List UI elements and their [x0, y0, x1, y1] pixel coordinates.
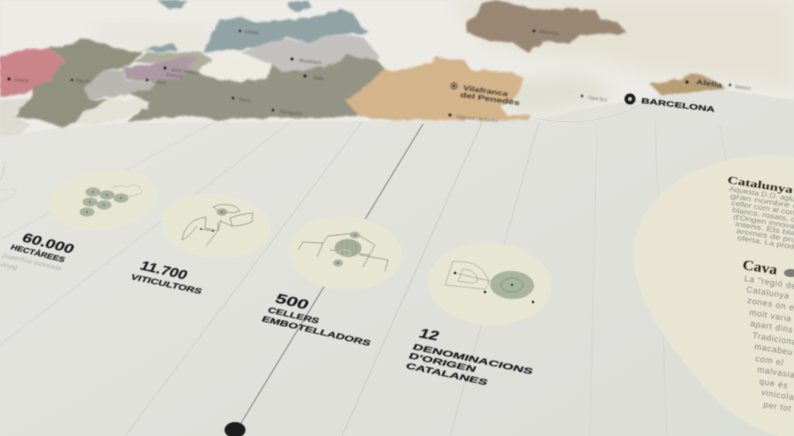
region: cream [197, 55, 273, 82]
badge circle: wineries [286, 213, 404, 293]
timeline end dot [224, 422, 246, 436]
region: light grey [85, 70, 157, 100]
panel: D.O. descriptions [633, 156, 794, 436]
text block: Catalunya [727, 175, 794, 254]
panel background blob [633, 156, 794, 436]
icon: D.O. monogram [445, 261, 535, 303]
region: purple [123, 57, 197, 80]
icon: grape bunch [80, 185, 142, 217]
map labels: Alella [696, 79, 723, 90]
region: blue small [143, 0, 312, 52]
stat: 11.700 viticultors [129, 189, 274, 296]
Barcelona label: BARCELONA [641, 96, 716, 114]
region: blue [203, 9, 370, 52]
text block: Catalunya: d'Origen innovadora [733, 214, 794, 234]
icon: cava marker [784, 269, 794, 277]
timeline guide lines [0, 120, 772, 436]
text block: Cava: apart dins [750, 318, 794, 335]
region: brown [466, 0, 627, 52]
value: 60.000 hectàrees [0, 230, 77, 273]
value: 500 cellers embotelladors: CELLERS [266, 306, 322, 326]
map labels: del Penedès [460, 92, 520, 107]
map labels: Montblanc [299, 58, 323, 66]
text block: Catalunya: intens. Els blancs [735, 221, 794, 240]
text block: Cava: macabeu [754, 341, 794, 357]
map labels: Vilafranca [463, 85, 508, 98]
icon: grape grower [182, 204, 253, 246]
map labels [8, 29, 751, 124]
region: tan grey [133, 52, 213, 72]
text block: Catalunya: aromes de prunes [736, 228, 794, 247]
value: 11.700 viticultors: 11.700 [138, 258, 190, 282]
coast curve [535, 105, 640, 122]
value: 60.000 hectàrees: 60.000 [20, 230, 77, 256]
map labels: Girona [14, 77, 30, 84]
region: cream bottom [75, 100, 147, 125]
value: 11.700 viticultors [129, 258, 204, 296]
text block: Catalunya: gran nombre de [730, 193, 794, 212]
text block: Cava [741, 258, 794, 413]
text block: Cava: Cava [741, 258, 778, 278]
map labels: Falset [152, 79, 167, 86]
value: 12 denominacions d'origen catalanes [404, 326, 536, 387]
value: 12 denominacions d'origen catalanes: DENOMINACIONS [411, 342, 536, 376]
region: olive right [127, 55, 392, 122]
value: 500 cellers embotelladors: EMBOTELLADORS [260, 315, 373, 348]
text block: Cava: Catalunya [746, 284, 790, 301]
map labels: Sant Sadurní [171, 67, 201, 77]
text block: Cava: que és [759, 376, 789, 391]
map labels: Lleida [245, 29, 259, 36]
map labels: Ripoll [76, 78, 89, 85]
value: 12 denominacions d'origen catalanes: D'ORIGEN [407, 351, 478, 374]
text block: Catalunya: celler com al conjunt [731, 200, 794, 219]
map labels: Valls [313, 75, 324, 82]
text block: Catalunya: Catalunya [727, 175, 794, 196]
map labels: Mataró [735, 84, 751, 92]
stat: 60.000 hectàrees [0, 163, 162, 273]
badge circle: denominations [426, 240, 554, 328]
region: Alella [649, 73, 727, 95]
map labels: d'Anoia [166, 72, 183, 80]
badge circle: growers [158, 189, 274, 263]
text block: Catalunya: blancs, rosats, cava [732, 207, 794, 226]
value: 12 denominacions d'origen catalanes: 12 [417, 326, 442, 343]
text block: Cava: molt varia [749, 307, 793, 324]
region: olive left [14, 38, 142, 127]
map labels: Vilanova i la Geltrú [456, 114, 498, 124]
value: 11.700 viticultors: VITICULTORS [129, 273, 204, 296]
badge circle: hectares [44, 163, 162, 237]
map labels: Reus [239, 97, 252, 104]
region: orange Vilafranca [345, 57, 531, 120]
text block: Cava: per tot [763, 399, 792, 413]
map of Catalan wine regions [0, 0, 794, 137]
text block: Cava: vinicola [761, 387, 794, 402]
value: 500 cellers embotelladors: 500 [273, 291, 312, 312]
map labels: Tarragona [279, 109, 302, 117]
region: lavender grey [240, 35, 380, 72]
Barcelona label [624, 94, 716, 114]
value: 60.000 hectàrees: (superfície conreada [2, 252, 62, 273]
text block: Cava: com el [755, 353, 785, 367]
region: pink [0, 48, 65, 97]
stat: 12 denominacions d'origen catalanes [404, 240, 554, 387]
value: 60.000 hectàrees: HECTÀREES [9, 243, 67, 264]
icon: winery building [298, 232, 388, 271]
value: 60.000 hectàrees: vinya) [0, 261, 18, 272]
stat: 500 cellers embotelladors [260, 213, 404, 348]
map relief ground [0, 0, 794, 137]
value: 12 denominacions d'origen catalanes: CATALANES [404, 361, 490, 387]
left edge icon fragment [0, 162, 16, 201]
value: 500 cellers embotelladors [260, 291, 373, 348]
map labels: Manresa [539, 29, 559, 37]
map labels: Sant Boi [588, 95, 607, 104]
